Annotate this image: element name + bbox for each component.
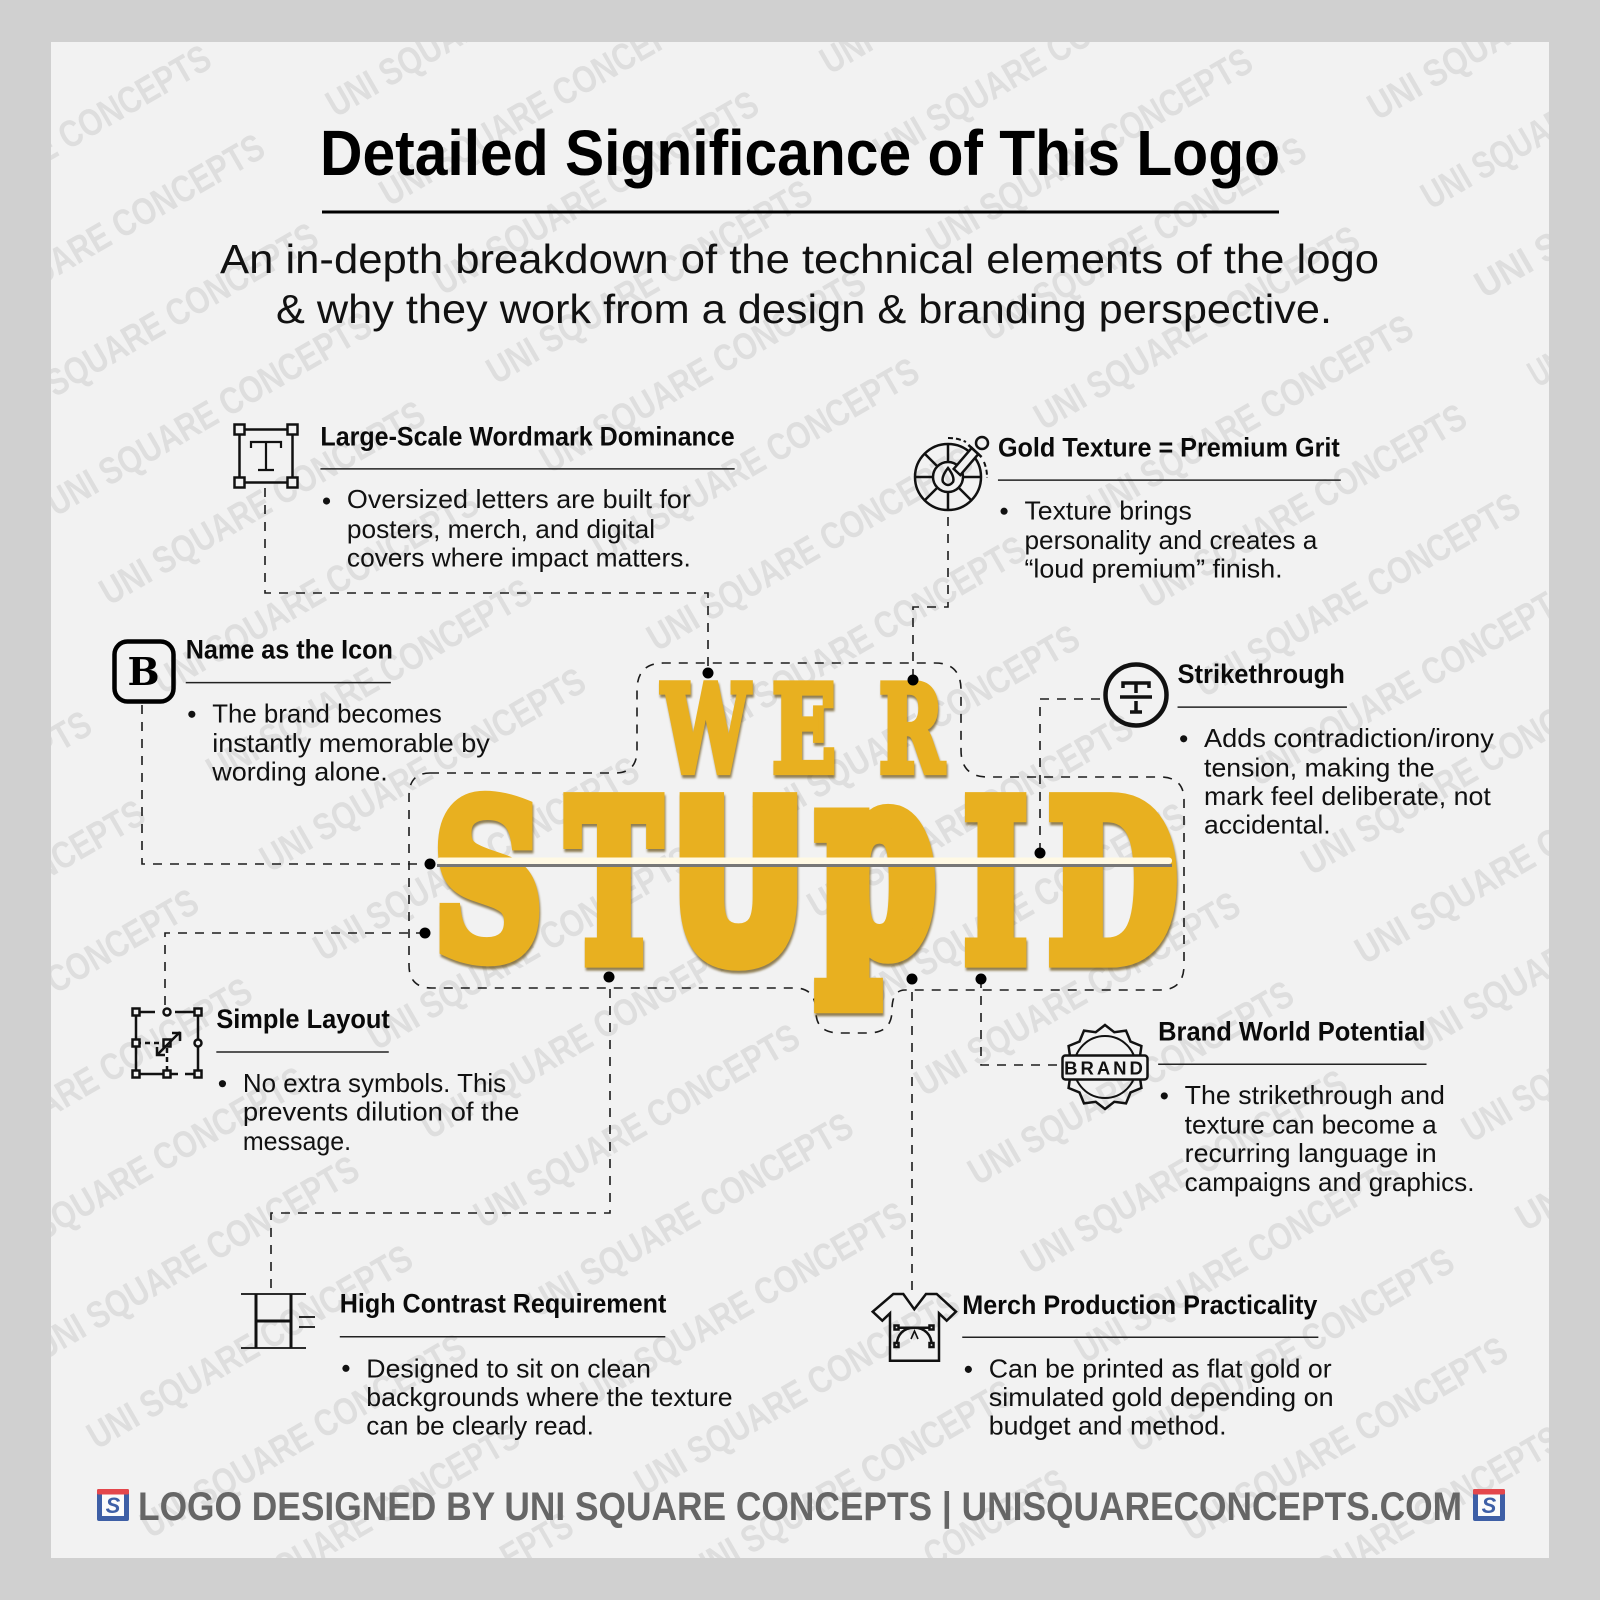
- watermark pattern: UNI SQUARE CONCEPTS: [1015, 1062, 1354, 1283]
- watermark pattern: UNI SQUARE CONCEPTS: [854, 795, 1194, 1016]
- connector: gold texture: [908, 517, 948, 686]
- callout: Gold Texture = Premium Grit: [915, 433, 1341, 584]
- watermark pattern: UNI SQUARE CONCEPTS: [414, 927, 754, 1148]
- callout text: [998, 433, 1341, 584]
- watermark pattern: UNI SQUARE CONCEPTS: [360, 838, 700, 1059]
- callout text: Brand World Potential: [1158, 1016, 1425, 1046]
- watermark pattern: UNI S: [1468, 224, 1568, 307]
- watermark pattern: UNI SQUARE CONCEPTS: [1081, 307, 1420, 528]
- callout text: recurring language in: [1185, 1140, 1437, 1168]
- watermark pattern: CONCEPTS: [917, 1461, 1074, 1577]
- watermark pattern: UNI SQUARE CONCEPTS: [521, 1105, 860, 1326]
- watermark pattern: UNI SQUARE CONCEPTS: [694, 528, 1034, 749]
- callout text: No extra symbols. This: [243, 1070, 506, 1098]
- logo word: STUPID: S: [434, 759, 542, 1006]
- watermark pattern: UNI SQUARE CONCEPTS: [640, 439, 980, 660]
- watermark pattern: UNI SQUARE CONCEPTS: [27, 1148, 366, 1369]
- connector: merch: [906, 974, 918, 1290]
- callout text: personality and creates a: [1024, 527, 1318, 555]
- subtitle: An in-depth breakdown of the technical elements of the logo: [220, 236, 1379, 282]
- callout text: Texture brings: [1024, 497, 1192, 525]
- watermark pattern: UNI SQUARE CONCEPTS: [574, 1194, 914, 1415]
- icon: right brand mark: [1473, 1489, 1505, 1521]
- watermark pattern: UNI SQUARE CONCEPTS: [961, 973, 1301, 1194]
- callout: Strikethrough: [1106, 659, 1494, 840]
- connector: strikethrough: [1034, 699, 1100, 858]
- logo word: WE R: R: [879, 659, 945, 800]
- icon: left brand mark: S: [106, 1493, 121, 1518]
- icon: t-shirt with vector curve: [873, 1294, 956, 1361]
- icon: bold B: [114, 642, 174, 702]
- callout text: [340, 1289, 733, 1441]
- callout text: posters, merch, and digital: [347, 516, 655, 544]
- callout text: Adds contradiction/irony: [1204, 725, 1494, 753]
- icon: text box: [234, 424, 298, 488]
- logo: WE R STUPID: [434, 659, 1177, 1011]
- icon: bold B: B: [127, 649, 160, 694]
- callout text: message.: [243, 1128, 351, 1156]
- callout text: Oversized letters are built for: [347, 486, 691, 514]
- icon: layout frame: [132, 1008, 202, 1078]
- watermark pattern: UNI SQUARE CONCEPTS: [1027, 218, 1367, 439]
- callout text: [1178, 659, 1494, 840]
- logo word: WE R: [661, 659, 945, 800]
- watermark pattern: UNI SQUARE CONCEPTS: [39, 304, 379, 525]
- callout text: Designed to sit on clean: [366, 1356, 651, 1384]
- watermark pattern: UNI SQUARE CONCEPTS: [426, 83, 766, 304]
- watermark pattern: UNI SQUARE CONCEPTS: [146, 482, 486, 703]
- watermark pattern: UNI SQUARE CONCEPTS: [1175, 1329, 1515, 1550]
- callout text: accidental.: [1204, 812, 1331, 840]
- connector: name as icon: [142, 705, 436, 870]
- callout text: mark feel deliberate, not: [1204, 783, 1491, 811]
- icon: brand badge: BRAND: [1064, 1058, 1146, 1078]
- watermark pattern: UNI SQUARE CONCEPTS: [253, 660, 593, 881]
- callout text: Name as the Icon: [186, 635, 393, 665]
- watermark pattern: UNI: [1509, 1174, 1580, 1240]
- connector: high contrast: [271, 972, 614, 1288]
- watermark pattern: UNI SQUARE CONCEPTS: [1068, 1151, 1408, 1372]
- connector: wordmark: [265, 488, 714, 678]
- callout text: [962, 1290, 1334, 1441]
- callout text: Strikethrough: [1178, 659, 1345, 689]
- callout: Brand World Potential: [1062, 1016, 1474, 1197]
- logo word: WE R: W: [661, 659, 751, 800]
- logo word: WE R: E: [772, 660, 836, 800]
- logo word: STUPID: p: [817, 712, 935, 1011]
- callout text: The brand becomes: [212, 700, 442, 728]
- logo strikethrough line: [437, 858, 1172, 867]
- icon: colour wheel and dropper: [915, 437, 988, 510]
- callout text: The strikethrough and: [1185, 1082, 1445, 1110]
- callout: Merch Production Practicality: [873, 1290, 1334, 1441]
- callout text: Gold Texture = Premium Grit: [998, 433, 1340, 463]
- callout text: [186, 635, 490, 787]
- logo word: STUPID: D: [1048, 755, 1177, 1010]
- callout text: prevents dilution of the: [243, 1098, 519, 1126]
- watermark pattern: UNI SQUARE CONCEPTS: [1188, 485, 1528, 706]
- callout text: [320, 421, 735, 572]
- watermark pattern: EPTS: [494, 1504, 580, 1579]
- icon: struck T: [1106, 664, 1166, 726]
- callout text: Large-Scale Wordmark Dominance: [320, 421, 735, 451]
- watermark pattern: UNI SQUARE CONCEPTS: [920, 40, 1260, 261]
- watermark pattern: UNI SQUARE CONCEPTS: [467, 1016, 807, 1237]
- callout text: [216, 1004, 519, 1156]
- icon: right brand mark: S: [1482, 1493, 1497, 1518]
- watermark pattern: UNI SQUARE CONCEPTS: [480, 172, 820, 393]
- watermark pattern: UN: [1521, 341, 1573, 396]
- watermark pattern: UNI SQUARE CONCEPTS: [801, 706, 1140, 927]
- footer text: LOGO DESIGNED BY UNI SQUARE CONCEPTS | UNISQUARECONCEPTS.COM: [138, 1485, 1462, 1529]
- callout: Simple Layout: [132, 1004, 519, 1156]
- callout: High Contrast Requirement: [241, 1289, 733, 1441]
- watermark pattern: UNI SQUARE CONCEPTS: [200, 571, 540, 792]
- callout text: [1158, 1016, 1474, 1197]
- callout text: High Contrast Requirement: [340, 1289, 666, 1319]
- callout text: instantly memorable by: [212, 730, 490, 758]
- watermark pattern: UNI SQUARE CONCEPTS: [747, 617, 1087, 838]
- watermark pattern: UNI SQUARE CONCEPTS: [93, 393, 432, 614]
- logo outline: dashed contour: [409, 663, 1184, 1033]
- callout text: backgrounds where the texture: [366, 1384, 733, 1412]
- callout text: can be clearly read.: [366, 1413, 594, 1441]
- callout text: Merch Production Practicality: [962, 1290, 1317, 1320]
- watermark pattern: UNI SQUARE CONCEPTS: [587, 350, 926, 571]
- icon: brand badge: [1062, 1025, 1148, 1109]
- callout text: “loud premium” finish.: [1024, 556, 1283, 584]
- logo word: STUPID: T: [567, 755, 661, 1010]
- subtitle: [220, 236, 1379, 332]
- watermark pattern: UNI SQUARE CONCEPTS: [628, 1283, 968, 1504]
- watermark pattern: UNI SQUARE CONCEPTS: [80, 1237, 420, 1458]
- watermark pattern: UNI SQUARE CONCEPTS: [1122, 1240, 1462, 1461]
- watermark pattern: UNI SQUARE CONCEPTS: [307, 749, 646, 970]
- callout text: Can be printed as flat gold or: [989, 1356, 1332, 1384]
- callout text: wording alone.: [211, 759, 388, 787]
- subtitle: & why they work from a design & branding perspective.: [276, 286, 1332, 332]
- watermark pattern: UNI SQUARE CONCEPTS: [908, 884, 1248, 1105]
- callout text: covers where impact matters.: [347, 544, 691, 572]
- callout text: campaigns and graphics.: [1185, 1169, 1474, 1197]
- logo word: STUPID: [434, 712, 1177, 1011]
- connector: brand world: [976, 974, 1062, 1065]
- watermark pattern: UNI SQUARE CONCEPTS: [1134, 396, 1474, 617]
- callout: Name as the Icon: [114, 635, 490, 787]
- connector: simple layout: [165, 928, 430, 1005]
- callout: Large-Scale Wordmark Dominance: [234, 421, 735, 572]
- icon: serif H with equals: [241, 1294, 315, 1348]
- watermark pattern: UNI SQUARE CONCEPTS: [974, 129, 1314, 350]
- icon: left brand mark: [97, 1489, 129, 1521]
- title: Detailed Significance of This Logo: [320, 117, 1280, 189]
- callout text: Simple Layout: [216, 1004, 390, 1034]
- callout text: tension, making the: [1204, 755, 1435, 783]
- footer credit: [97, 1485, 1505, 1529]
- logo word: STUPID: I: [964, 755, 1027, 1011]
- callout text: simulated gold depending on: [989, 1384, 1334, 1412]
- callout text: budget and method.: [989, 1413, 1227, 1441]
- watermark pattern: SQUARE CONCEPTS: [250, 1415, 527, 1600]
- watermark pattern: UNI SQUARE CONCEPTS: [533, 261, 873, 482]
- logo word: STUPID: U: [671, 758, 806, 1011]
- watermark pattern: UNI SQUARE CONCEPTS: [134, 1326, 474, 1547]
- watermark pattern: UNI SQUARE CONCEPTS: [681, 1372, 1021, 1593]
- callout text: texture can become a: [1185, 1112, 1438, 1140]
